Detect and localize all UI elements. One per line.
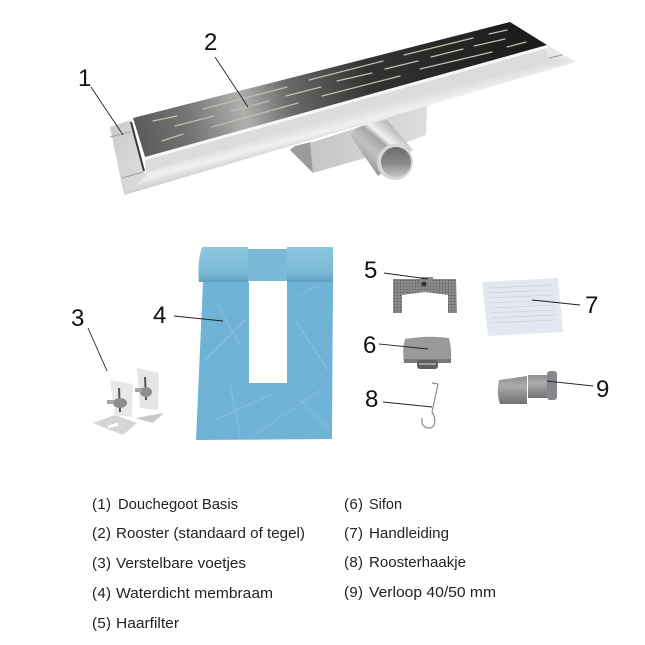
parts list right column: (9) <box>344 584 363 601</box>
parts list right column: Verloop 40/50 mm <box>369 584 496 601</box>
mounting bracket <box>290 142 313 173</box>
reducer <box>498 371 557 404</box>
hair filter <box>393 277 457 313</box>
parts list left column: (3) <box>92 555 111 572</box>
parts list left column: (1) <box>92 496 111 513</box>
membrane roll right <box>287 247 333 282</box>
parts list left column <box>92 496 305 632</box>
adjustable feet <box>93 368 164 435</box>
parts list right column <box>344 496 496 601</box>
flange and channel <box>124 58 576 195</box>
parts list left column: Haarfilter <box>116 615 179 632</box>
number 8: 8 <box>365 386 378 413</box>
number 5: 5 <box>364 257 377 284</box>
membrane sheet <box>196 282 333 440</box>
parts list right column: (8) <box>344 554 363 571</box>
parts list right column: Roosterhaakje <box>369 554 466 571</box>
parts list left column: (5) <box>92 615 111 632</box>
flange end face <box>110 120 146 195</box>
leader line 9 <box>547 381 593 386</box>
parts list right column: (6) <box>344 496 363 513</box>
leader line 6 <box>379 344 428 349</box>
number 1: 1 <box>78 65 91 92</box>
membrane roll left <box>198 247 248 282</box>
leader line 4 <box>174 316 223 321</box>
membrane roll middle <box>248 249 287 281</box>
number 3: 3 <box>71 305 84 332</box>
front foot <box>93 415 137 435</box>
membrane <box>196 247 333 440</box>
leader line 8 <box>383 402 432 407</box>
number 4: 4 <box>153 302 166 329</box>
grate slots <box>153 30 526 141</box>
leader line 5 <box>384 273 428 279</box>
grate <box>133 22 547 157</box>
drain base product photo <box>110 22 576 195</box>
parts list right column: (7) <box>344 525 363 542</box>
number 6: 6 <box>363 332 376 359</box>
parts list left column: (4) <box>92 585 111 602</box>
number 7: 7 <box>585 292 598 319</box>
leader line 7 <box>532 300 580 305</box>
back foot <box>135 413 164 423</box>
leader line 3 <box>88 328 107 371</box>
membrane streaks <box>205 285 330 435</box>
grate frame end <box>131 122 144 171</box>
leader line 2 <box>215 57 248 107</box>
drain underside box <box>310 105 427 173</box>
parts list left column: Rooster (standaard of tegel) <box>116 525 305 542</box>
parts list left column: Verstelbare voetjes <box>116 555 246 572</box>
parts list left column: Douchegoot Basis <box>118 496 238 513</box>
hook <box>422 383 438 428</box>
parts list left column: (2) <box>92 525 111 542</box>
number 2: 2 <box>204 29 217 56</box>
parts list left column: Waterdicht membraam <box>116 585 273 602</box>
number 9: 9 <box>596 376 609 403</box>
leader line 1 <box>91 87 123 135</box>
parts list right column: Sifon <box>369 496 402 513</box>
parts list right column: Handleiding <box>369 525 449 542</box>
outlet pipe <box>350 120 413 176</box>
manual <box>482 278 563 336</box>
siphon <box>403 337 451 369</box>
